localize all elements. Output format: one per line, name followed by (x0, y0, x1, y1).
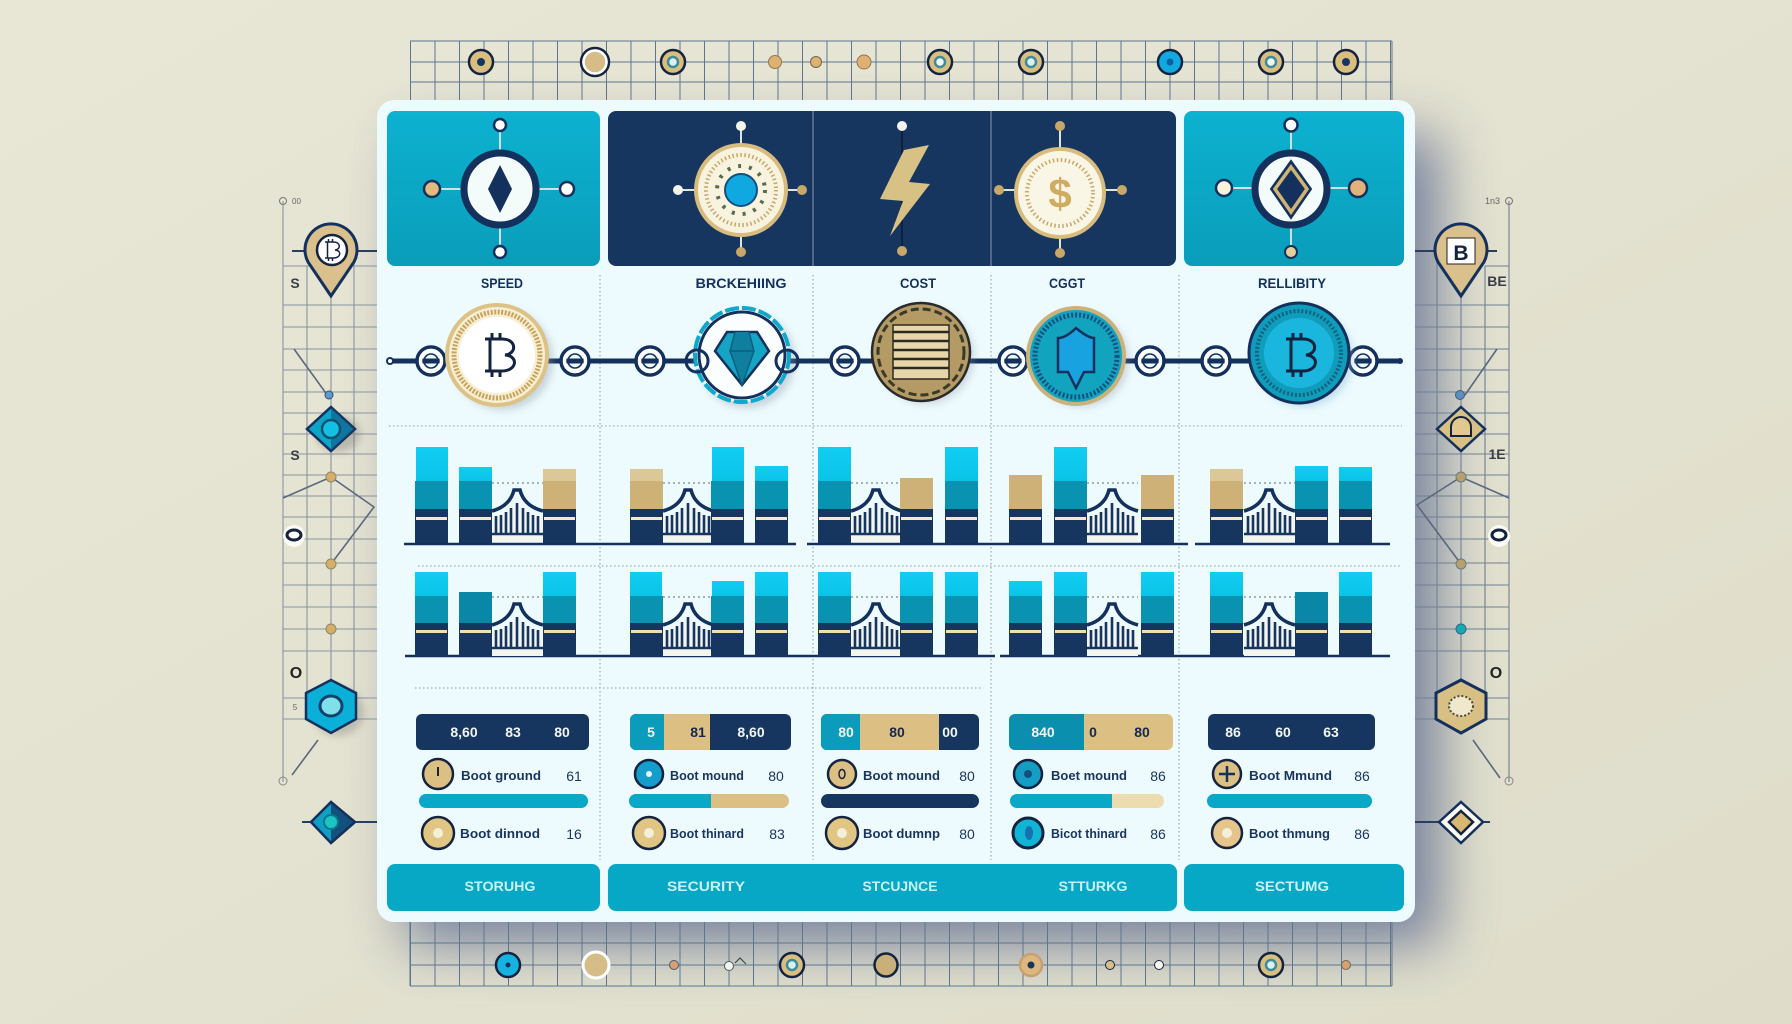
progress bar (419, 794, 588, 808)
coin: shield (1028, 308, 1129, 407)
metric row (633, 817, 785, 849)
progress bar (1010, 794, 1164, 808)
metric row: Boet mound (1051, 768, 1127, 783)
progress bar (821, 794, 979, 808)
right axis labels: 1n3 (1485, 196, 1500, 206)
value pill: 80 (838, 724, 854, 740)
right axis labels: BE (1487, 273, 1507, 289)
metric row: Boot thmung (1249, 826, 1330, 841)
chart group 3 (818, 447, 978, 543)
icon: tan diamond (1437, 407, 1485, 451)
bar chart row 2 (405, 572, 1390, 656)
icon: white oval (283, 525, 305, 547)
column labels: CGGT (1049, 275, 1085, 291)
metric row: 80 (768, 768, 784, 784)
icon: pin B: B (1453, 242, 1469, 265)
coin: bitcoin teal (1249, 303, 1353, 407)
top grid strip (410, 41, 1392, 101)
footer: middle: STCUJNCE (862, 878, 938, 894)
metric row: 86 (1150, 826, 1166, 842)
icon: lightning bolt (880, 121, 930, 256)
footer: middle: STTURKG (1058, 878, 1128, 894)
progress bar (629, 794, 789, 808)
value pill: 86 (1225, 724, 1241, 740)
footer: right (1184, 864, 1404, 911)
coin: striped bronze (872, 303, 974, 404)
value pill: 8,60 (450, 724, 478, 740)
metric row: 86 (1354, 768, 1370, 784)
column labels: RELLIBITY (1258, 275, 1327, 291)
metric row: Boot mound (670, 768, 744, 783)
value pill: 80 (554, 724, 570, 740)
metric row: Boot mound (863, 768, 940, 783)
metric row: Boot ground (461, 768, 541, 783)
metric row: 16 (566, 826, 582, 842)
chain links over diamond coin (686, 350, 798, 372)
value pill: 0 (1089, 724, 1097, 740)
metric row (635, 760, 784, 788)
icon: node (1456, 390, 1464, 400)
value pill: 83 (505, 724, 521, 740)
metric row: Boot dumnp (863, 826, 940, 841)
left axis labels: S (290, 275, 300, 291)
value pill (1009, 714, 1173, 750)
metric row (828, 760, 975, 788)
column labels: COST (900, 275, 936, 291)
footer: left: STORUHG (464, 878, 536, 894)
icon: diamond (307, 407, 360, 452)
left side grid (279, 197, 377, 843)
top grid nodes (469, 48, 1358, 76)
stats column 4 (1009, 714, 1173, 848)
chart group 3 (818, 572, 978, 656)
left axis labels: O (290, 665, 302, 682)
chart group 4 (1009, 572, 1174, 656)
stats column 5 (1207, 714, 1375, 848)
chart group 2 (630, 572, 788, 656)
chart group 4 (1009, 447, 1174, 543)
column labels: SPEED (481, 275, 523, 291)
icon: white diamond (1439, 802, 1483, 843)
icon: dollar coin (994, 121, 1127, 258)
panel: navy header (608, 111, 1176, 266)
icon: hexagon (306, 680, 364, 736)
left axis labels (290, 197, 302, 712)
chart group 1 (415, 447, 576, 543)
panel: speed header (387, 111, 600, 266)
icon: tan hexagon (1436, 680, 1486, 733)
footer: left (387, 864, 600, 911)
left axis labels: 00 (292, 197, 301, 206)
metric row: Bicot thinard (1051, 826, 1127, 841)
left axis labels: S (290, 447, 300, 463)
metric row (1213, 760, 1370, 788)
chart group 1 (415, 572, 576, 656)
metric row: 83 (769, 826, 785, 842)
right side grid (1415, 196, 1513, 843)
dividers (389, 275, 1402, 860)
value pill: 80 (1134, 724, 1150, 740)
chart group 5 (1210, 572, 1372, 656)
metric row (1212, 818, 1370, 848)
metric row (422, 817, 582, 849)
icon: pin bitcoin (305, 224, 357, 296)
value pill: 8,60 (737, 724, 765, 740)
right axis labels: O (1490, 665, 1502, 682)
icon: tan nodes (326, 472, 336, 634)
icon: pin B (1435, 224, 1487, 296)
coin: diamond (695, 308, 795, 408)
coin: bitcoin gold (447, 305, 553, 410)
metric row (1014, 760, 1166, 788)
metric row: Boot Mmund (1249, 768, 1332, 783)
icon: bottom diamond (311, 802, 355, 843)
value pill: 81 (690, 724, 706, 740)
value pill (1208, 714, 1375, 750)
stats column 3 (821, 714, 979, 849)
icon: dollar coin: $ (1048, 170, 1072, 217)
metric row: Boot dinnod (460, 826, 540, 841)
value pill (630, 714, 791, 750)
chart group 5 (1210, 466, 1372, 543)
panel: reliability header (1184, 111, 1404, 266)
metric row: 86 (1354, 826, 1370, 842)
value pill: 840 (1031, 724, 1055, 740)
bar chart row 1 (404, 447, 1390, 544)
metric row: Boot thinard (670, 826, 744, 841)
chain links (417, 347, 1377, 375)
chain with coins (387, 303, 1403, 410)
icon: small node (325, 391, 333, 399)
icon: nodes (1456, 472, 1466, 634)
bottom grid strip (410, 920, 1392, 986)
bottom grid nodes (496, 952, 1350, 978)
value pill: 80 (889, 724, 905, 740)
metric row (423, 759, 582, 789)
footer: middle: SECURITY (667, 878, 746, 894)
column labels: BRCKEHIING (696, 275, 787, 291)
progress bar (1207, 794, 1372, 808)
panel: main card (377, 100, 1415, 922)
value pill: 60 (1275, 724, 1291, 740)
stats column 2 (629, 714, 791, 849)
metric row: 80 (959, 826, 975, 842)
left axis labels: 5 (293, 703, 298, 712)
value pill (416, 714, 589, 750)
metric row: 80 (959, 768, 975, 784)
chart group 2 (630, 447, 788, 543)
icon: gold coin with cyan centre (673, 121, 807, 257)
right axis labels: 1E (1488, 446, 1506, 462)
value pill: 00 (942, 724, 958, 740)
footer: middle (608, 864, 1177, 911)
value pill: 63 (1323, 724, 1339, 740)
footer: right: SECTUMG (1255, 878, 1329, 894)
stats column 1 (416, 714, 589, 849)
value pill (821, 714, 979, 750)
metric row (1013, 818, 1166, 848)
metric row (826, 817, 975, 849)
right axis labels (1485, 196, 1507, 682)
metric row: 86 (1150, 768, 1166, 784)
icon: white oval (1488, 525, 1510, 547)
metric row: 61 (566, 768, 582, 784)
column labels (481, 275, 1327, 291)
value pill: 5 (647, 724, 655, 740)
